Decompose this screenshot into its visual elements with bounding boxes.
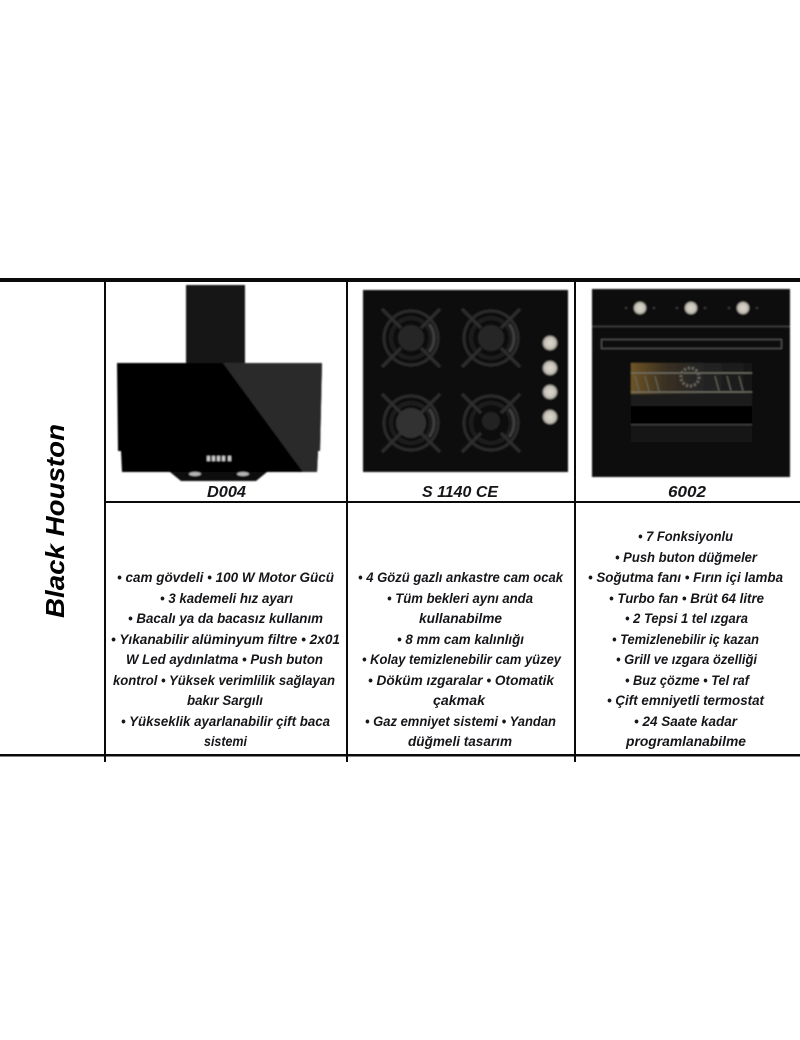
text block: S 1140 CE features: düğmeli tasarım (408, 734, 512, 749)
control knobs (542, 336, 558, 424)
text block: D004 features: kontrol • Yüksek verimlilik sağlayan (113, 673, 335, 688)
text block: S 1140 CE features: • Kolay temizlenebilir cam yüzey (362, 652, 562, 667)
text block: D004 features: bakır Sargılı (187, 693, 263, 708)
text block: D004 features: • Yükseklik ayarlanabilir çift baca (121, 714, 330, 729)
panel: 6002 built-in oven (592, 289, 790, 477)
model label: D004: D004 (207, 484, 246, 501)
model label: 6002: 6002 (668, 484, 706, 501)
text block: 6002 features: • Grill ve ızgara özelliği (616, 652, 757, 667)
text block: D004 features: W Led aydınlatma • Push buton (126, 652, 323, 667)
text block: 6002 features: • Temizlenebilir iç kazan (612, 632, 759, 647)
hob surface (363, 290, 568, 472)
text block: 6002 features: • 7 Fonksiyonlu (638, 529, 734, 544)
panel: S 1140 CE gas hob (363, 290, 568, 472)
panel: D004 cooker hood (117, 285, 322, 481)
text block: S 1140 CE features: • 8 mm cam kalınlığı (397, 632, 524, 647)
hood glass body (117, 363, 322, 481)
text block: D004 features: • Yıkanabilir alüminyum filtre • 2x01 (111, 632, 340, 647)
text block: D004 features: • cam gövdeli • 100 W Motor Gücü (117, 570, 335, 585)
text block: S 1140 CE features: • Döküm ızgaralar • Otomatik (368, 673, 556, 688)
text block: 6002 features (588, 529, 783, 749)
text block: 6002 features: programlanabilme (625, 734, 747, 749)
led lights (189, 472, 249, 476)
text block: D004 features: sistemi (204, 734, 247, 749)
control strip (592, 307, 790, 327)
text block: D004 features: • Bacalı ya da bacasız kullanım (128, 611, 323, 626)
burners (382, 309, 520, 452)
model label: S 1140 CE: S 1140 CE (422, 484, 499, 501)
push buttons (207, 456, 231, 461)
text block: 6002 features: • Push buton düğmeler (615, 550, 758, 565)
text block: S 1140 CE features: • Tüm bekleri aynı anda (387, 591, 533, 606)
text block: 6002 features: • 2 Tepsi 1 tel ızgara (625, 611, 748, 626)
text block: 6002 features: • Buz çözme • Tel raf (625, 673, 750, 688)
side heading: Black Houston: Black Houston (40, 424, 70, 618)
oven body (592, 289, 790, 477)
text block: S 1140 CE features: • 4 Gözü gazlı ankastre cam ocak (358, 570, 564, 585)
text block: S 1140 CE features: kullanabilme (419, 611, 502, 626)
text block: S 1140 CE features: çakmak (433, 693, 487, 708)
text block: 6002 features: • Turbo fan • Brüt 64 litre (609, 591, 764, 606)
text block: D004 features: • 3 kademeli hız ayarı (160, 591, 293, 606)
text block: S 1140 CE features: • Gaz emniyet sistemi • Yandan (365, 714, 556, 729)
oven window (631, 363, 752, 442)
table grid (0, 278, 800, 762)
text block: 6002 features: • 24 Saate kadar (634, 714, 738, 729)
oven handle (602, 340, 782, 348)
text block: S 1140 CE features (358, 570, 564, 749)
text block: 6002 features: • Çift emniyetli termostat (607, 693, 764, 708)
oven knobs (634, 302, 750, 314)
hood chimney (186, 285, 245, 363)
text block: D004 features (111, 570, 340, 749)
text block: 6002 features: • Soğutma fanı • Fırın içi lamba (588, 570, 783, 585)
